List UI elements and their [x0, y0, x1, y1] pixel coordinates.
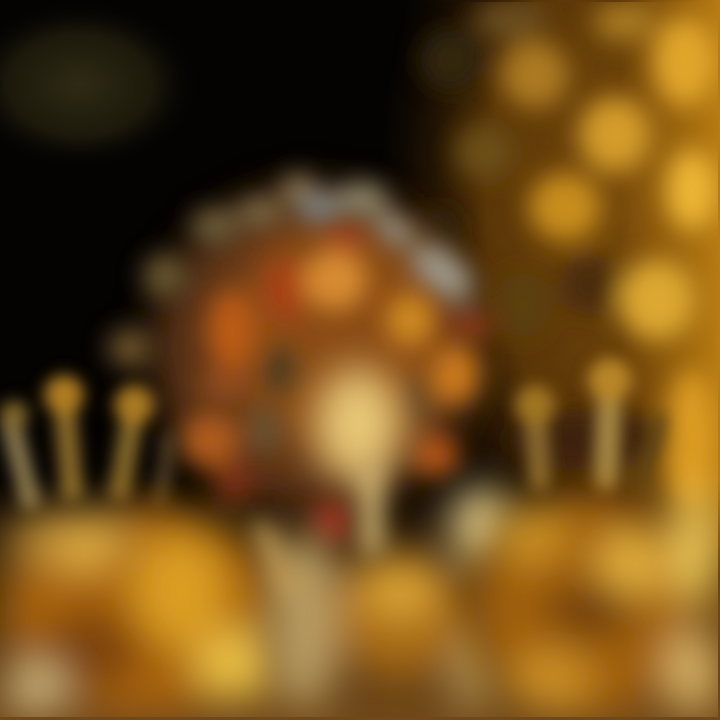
spike ring	[108, 174, 492, 368]
central virus	[108, 174, 492, 546]
lower left virus	[0, 375, 275, 716]
lower base tone	[0, 480, 720, 720]
core	[155, 190, 475, 510]
upper right base tone	[380, 0, 720, 560]
spikes	[0, 375, 170, 500]
right edge tone	[620, 0, 720, 720]
body	[4, 505, 275, 716]
orange interior patches	[180, 228, 479, 546]
dim glow top left	[0, 0, 200, 170]
lower centre virus	[262, 470, 510, 716]
lower right virus	[475, 358, 718, 717]
spikes	[515, 358, 660, 480]
bright centre	[314, 367, 402, 483]
large virus top right	[420, 2, 718, 510]
surface bumps	[420, 2, 718, 510]
body	[475, 485, 718, 717]
